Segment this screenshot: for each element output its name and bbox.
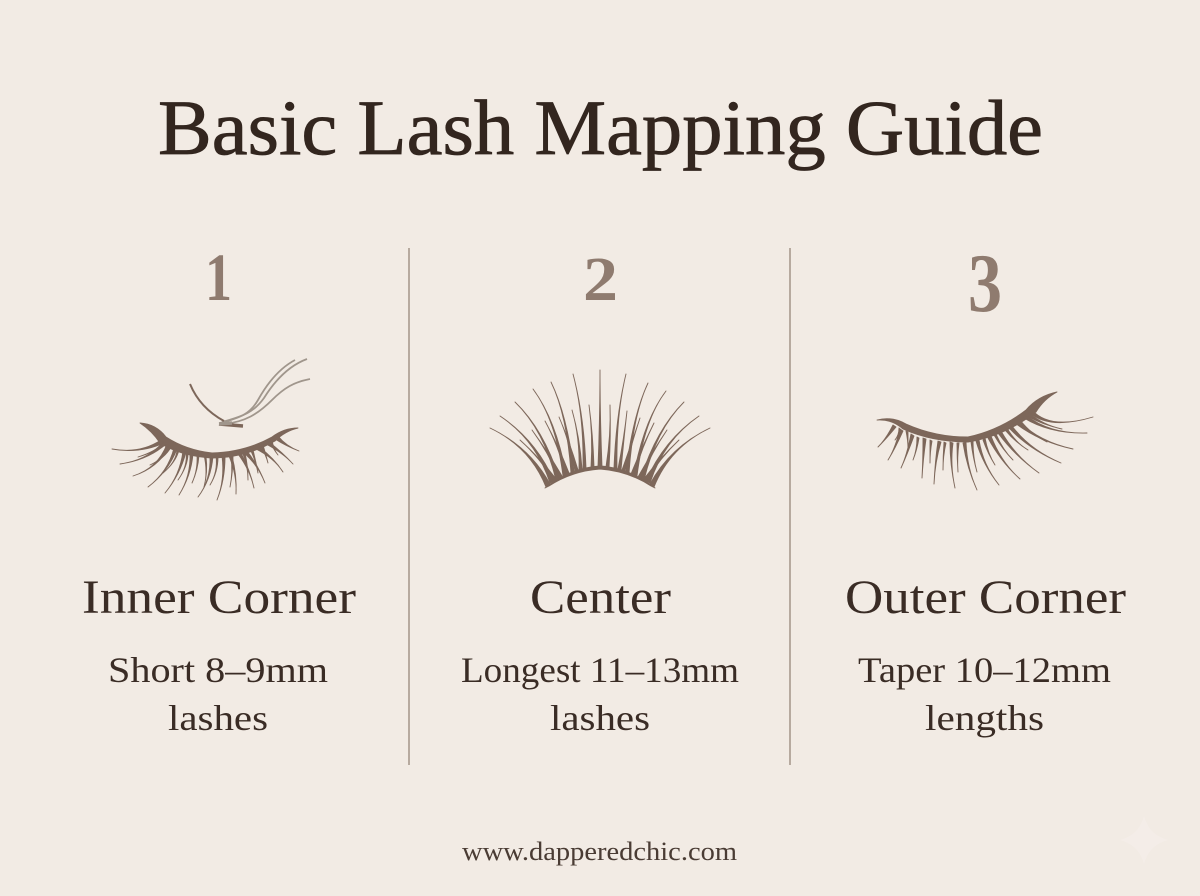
icon: outer corner lashes xyxy=(877,392,1093,490)
description: center: Longest 11–13mm xyxy=(461,650,739,690)
description: outer corner xyxy=(858,650,1111,738)
step number 3: 3 xyxy=(968,237,1002,330)
icon: tweezers xyxy=(190,359,310,426)
description: inner corner: Short 8–9mm xyxy=(108,650,328,690)
panel: inner corner xyxy=(82,239,356,738)
heading: center: Center xyxy=(530,571,671,624)
panel: center xyxy=(461,246,739,738)
description: outer corner: lengths xyxy=(925,698,1044,738)
panel: outer corner xyxy=(845,237,1126,738)
icon: closed eye lashes xyxy=(112,423,299,500)
description: inner corner xyxy=(108,650,328,738)
description: center xyxy=(461,650,739,738)
title: Basic Lash Mapping Guide xyxy=(158,84,1043,171)
heading: outer corner: Outer Corner xyxy=(845,571,1126,624)
footer url: www.dapperedchic.com xyxy=(462,837,737,866)
step number 1: 1 xyxy=(205,239,232,315)
icon: eye with tweezers xyxy=(112,359,310,500)
description: center: lashes xyxy=(550,698,650,738)
icon: sparkle xyxy=(1120,816,1168,864)
heading: inner corner: Inner Corner xyxy=(82,571,356,624)
description: inner corner: lashes xyxy=(168,698,268,738)
icon: center fan lashes xyxy=(490,370,710,488)
step number 2: 2 xyxy=(583,246,618,314)
description: outer corner: Taper 10–12mm xyxy=(858,650,1111,690)
